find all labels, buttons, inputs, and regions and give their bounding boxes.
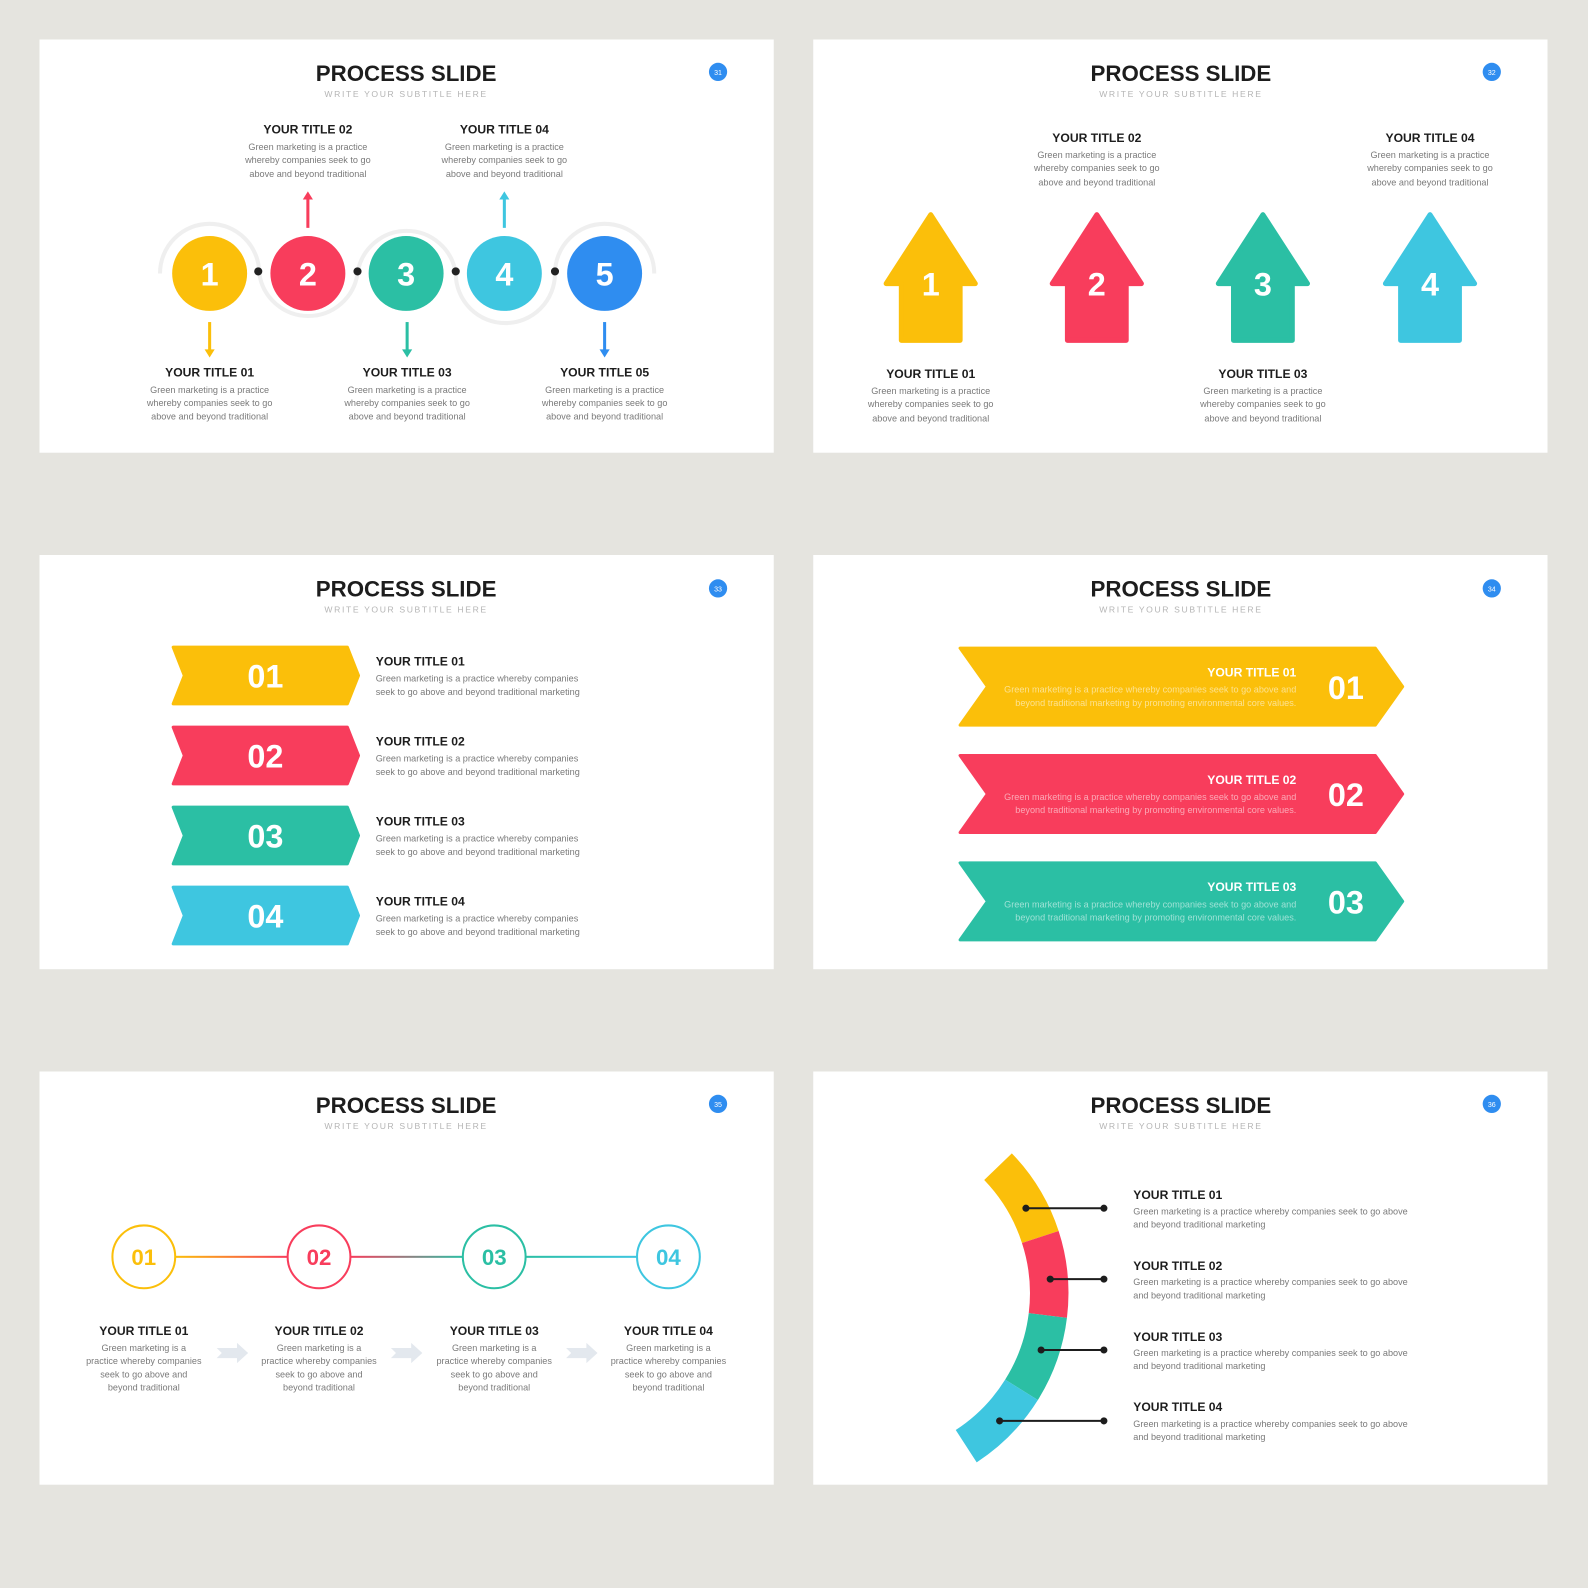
text blocks: seek to go above and beyond traditional marketing <box>376 847 580 857</box>
text blocks: YOUR TITLE 01 <box>376 654 465 668</box>
text blocks: beyond traditional <box>283 1383 355 1393</box>
text blocks: and beyond traditional marketing <box>1133 1219 1265 1229</box>
arrows <box>205 191 610 358</box>
text blocks: Green marketing is a <box>626 1343 712 1353</box>
heading: WRITE YOUR SUBTITLE HERE <box>324 1121 488 1131</box>
text blocks: above and beyond traditional <box>1038 177 1155 187</box>
ribbons: 04 <box>247 899 283 935</box>
ribbons: 02 <box>247 739 283 775</box>
text blocks: Green marketing is a practice whereby companies <box>376 914 579 924</box>
text blocks: Green marketing is a practice <box>445 142 564 152</box>
page badge: 33 <box>714 585 722 593</box>
text blocks: whereby companies seek to go <box>343 398 470 408</box>
page badge <box>709 579 727 598</box>
panel: slide 36 <box>813 1071 1547 1485</box>
text blocks: whereby companies seek to go <box>146 398 272 408</box>
text blocks: Green marketing is a practice whereby companies <box>376 754 579 764</box>
heading <box>1091 577 1271 615</box>
gray arrows <box>217 1343 598 1363</box>
text blocks: beyond traditional marketing by promoting environmental core values. <box>1015 698 1296 708</box>
text blocks: above and beyond traditional <box>1372 177 1489 187</box>
text blocks: whereby companies seek to go <box>1033 163 1160 173</box>
text blocks: seek to go above and beyond traditional marketing <box>376 687 580 697</box>
timeline <box>112 1225 700 1288</box>
text blocks: YOUR TITLE 04 <box>624 1324 713 1338</box>
panel: slide 35 <box>39 1071 774 1485</box>
text blocks: seek to go above and <box>625 1369 712 1379</box>
long arrows: 03 <box>1328 885 1364 921</box>
text blocks: YOUR TITLE 01 <box>1207 666 1297 680</box>
text blocks <box>867 131 1493 423</box>
text blocks: Green marketing is a <box>452 1343 537 1353</box>
timeline: 03 <box>482 1245 507 1270</box>
heading <box>1091 1093 1271 1131</box>
text blocks: seek to go above and <box>451 1369 538 1379</box>
heading: WRITE YOUR SUBTITLE HERE <box>1099 1121 1263 1131</box>
heading: WRITE YOUR SUBTITLE HERE <box>1099 89 1263 99</box>
text blocks: and beyond traditional marketing <box>1133 1432 1265 1442</box>
text blocks: Green marketing is a practice <box>348 385 467 395</box>
circles: 2 <box>299 257 317 293</box>
text blocks: YOUR TITLE 02 <box>263 123 353 137</box>
text blocks: YOUR TITLE 01 <box>886 367 975 381</box>
panel: slide 33 <box>39 555 774 969</box>
text blocks: YOUR TITLE 04 <box>376 894 465 908</box>
timeline: 04 <box>656 1245 681 1270</box>
page badge: 36 <box>1488 1101 1496 1109</box>
heading: WRITE YOUR SUBTITLE HERE <box>324 89 488 99</box>
text blocks: above and beyond traditional <box>349 411 466 421</box>
text blocks <box>146 123 667 421</box>
text blocks: practice whereby companies <box>86 1356 202 1366</box>
text blocks: whereby companies seek to go <box>541 398 667 408</box>
text blocks: seek to go above and <box>100 1369 187 1379</box>
text blocks: beyond traditional <box>632 1383 704 1393</box>
up arrows: 2 <box>1088 267 1106 303</box>
ribbons: 01 <box>247 659 283 695</box>
timeline: 01 <box>131 1245 156 1270</box>
heading <box>1091 61 1271 99</box>
text blocks: YOUR TITLE 03 <box>376 814 465 828</box>
panel: slide 34 <box>813 555 1547 969</box>
heading: PROCESS SLIDE <box>1091 577 1271 602</box>
text blocks: and beyond traditional marketing <box>1133 1290 1265 1300</box>
up arrows <box>886 215 1475 340</box>
text blocks: Green marketing is a practice <box>150 385 269 395</box>
gray arcs <box>160 224 654 323</box>
heading: WRITE YOUR SUBTITLE HERE <box>324 605 488 615</box>
text blocks: Green marketing is a practice <box>871 386 990 396</box>
text blocks: whereby companies seek to go <box>1366 163 1493 173</box>
text blocks: whereby companies seek to go <box>441 155 567 165</box>
panel: slide 32 <box>813 39 1547 453</box>
heading: PROCESS SLIDE <box>1091 61 1271 86</box>
text blocks: and beyond traditional marketing <box>1133 1361 1265 1371</box>
text blocks: Green marketing is a practice whereby companies <box>376 674 579 684</box>
text blocks: beyond traditional <box>458 1383 530 1393</box>
text blocks: Green marketing is a practice whereby companies <box>376 834 579 844</box>
page badge: 35 <box>714 1101 722 1109</box>
text blocks: above and beyond traditional <box>546 411 663 421</box>
text blocks: YOUR TITLE 01 <box>99 1324 189 1338</box>
ribbons <box>173 647 359 944</box>
heading <box>316 577 496 615</box>
text blocks: YOUR TITLE 04 <box>1133 1400 1223 1414</box>
page badge <box>1483 63 1501 81</box>
page badge <box>709 1095 727 1113</box>
up arrows: 1 <box>922 267 940 303</box>
heading <box>316 1093 496 1131</box>
text blocks: practice whereby companies <box>436 1356 552 1366</box>
page badge <box>1483 579 1501 598</box>
text blocks: YOUR TITLE 03 <box>1133 1330 1223 1344</box>
text blocks: YOUR TITLE 01 <box>165 366 254 380</box>
text blocks: Green marketing is a practice whereby companies seek to go above and <box>1004 899 1296 909</box>
circles: 4 <box>495 257 513 293</box>
long arrows <box>960 648 1403 940</box>
circles: 1 <box>201 257 219 293</box>
page badge: 31 <box>714 69 722 77</box>
text blocks: Green marketing is a practice <box>1371 150 1490 160</box>
text blocks <box>376 654 580 937</box>
text blocks: Green marketing is a practice whereby companies seek to go above <box>1133 1277 1408 1287</box>
text blocks: seek to go above and <box>275 1369 363 1379</box>
text blocks: whereby companies seek to go <box>867 399 994 409</box>
text blocks: YOUR TITLE 02 <box>274 1324 364 1338</box>
text blocks: Green marketing is a practice whereby companies seek to go above <box>1133 1206 1408 1216</box>
circles: 3 <box>397 257 415 293</box>
text blocks: above and beyond traditional <box>249 169 366 179</box>
text blocks: Green marketing is a practice <box>545 385 664 395</box>
heading: PROCESS SLIDE <box>316 1093 496 1118</box>
text blocks: YOUR TITLE 02 <box>1207 773 1297 787</box>
text blocks: whereby companies seek to go <box>1199 399 1326 409</box>
heading <box>316 61 496 99</box>
text blocks: YOUR TITLE 02 <box>376 734 465 748</box>
text blocks: Green marketing is a <box>102 1343 187 1353</box>
text blocks: Green marketing is a practice <box>248 142 367 152</box>
long arrows: 01 <box>1328 670 1364 706</box>
text blocks: YOUR TITLE 01 <box>1133 1188 1223 1202</box>
text blocks: above and beyond traditional <box>1204 413 1321 423</box>
up arrows: 3 <box>1254 267 1272 303</box>
ribbons: 03 <box>247 819 283 855</box>
text blocks: Green marketing is a practice whereby companies seek to go above and <box>1004 685 1296 695</box>
text blocks: Green marketing is a practice whereby companies seek to go above <box>1133 1348 1408 1358</box>
page badge <box>709 63 727 81</box>
text blocks: beyond traditional marketing by promoting environmental core values. <box>1015 805 1296 815</box>
text blocks: Green marketing is a practice <box>1203 386 1322 396</box>
text blocks: beyond traditional <box>108 1383 180 1393</box>
circles: 5 <box>596 257 614 293</box>
page badge <box>1483 1095 1501 1113</box>
text blocks: YOUR TITLE 03 <box>450 1324 539 1338</box>
text blocks: practice whereby companies <box>611 1356 727 1366</box>
text blocks: YOUR TITLE 04 <box>460 123 549 137</box>
heading: PROCESS SLIDE <box>1091 1093 1271 1118</box>
text blocks: YOUR TITLE 02 <box>1052 131 1142 145</box>
connector lines <box>997 1206 1106 1423</box>
text blocks: YOUR TITLE 02 <box>1133 1259 1223 1273</box>
text blocks: YOUR TITLE 05 <box>560 366 649 380</box>
timeline: 02 <box>307 1245 331 1270</box>
text blocks: beyond traditional marketing by promoting environmental core values. <box>1015 913 1296 923</box>
heading: PROCESS SLIDE <box>316 61 496 86</box>
text blocks: Green marketing is a <box>277 1343 362 1353</box>
long arrows: 02 <box>1328 777 1364 813</box>
up arrows: 4 <box>1421 267 1439 303</box>
heading: WRITE YOUR SUBTITLE HERE <box>1099 605 1263 615</box>
text blocks: practice whereby companies <box>261 1356 377 1366</box>
page badge: 34 <box>1488 585 1496 593</box>
text blocks: above and beyond traditional <box>151 411 268 421</box>
text blocks: YOUR TITLE 03 <box>1207 880 1297 894</box>
circles <box>172 236 642 311</box>
text blocks: seek to go above and beyond traditional marketing <box>376 767 580 777</box>
text blocks <box>1004 666 1297 923</box>
text blocks: Green marketing is a practice <box>1037 150 1156 160</box>
text blocks <box>86 1324 727 1393</box>
text blocks: YOUR TITLE 04 <box>1385 131 1475 145</box>
text blocks: Green marketing is a practice whereby companies seek to go above <box>1133 1419 1408 1429</box>
page badge: 32 <box>1488 69 1496 77</box>
text blocks <box>1133 1188 1408 1442</box>
text blocks: YOUR TITLE 03 <box>1218 367 1308 381</box>
text blocks: Green marketing is a practice whereby companies seek to go above and <box>1004 792 1296 802</box>
panel: slide 31 <box>39 39 774 453</box>
heading: PROCESS SLIDE <box>316 577 496 602</box>
text blocks: whereby companies seek to go <box>244 155 371 165</box>
text blocks: seek to go above and beyond traditional marketing <box>376 927 580 937</box>
text blocks: YOUR TITLE 03 <box>363 366 452 380</box>
text blocks: above and beyond traditional <box>446 169 563 179</box>
arc chart <box>956 1153 1068 1462</box>
text blocks: above and beyond traditional <box>872 413 989 423</box>
